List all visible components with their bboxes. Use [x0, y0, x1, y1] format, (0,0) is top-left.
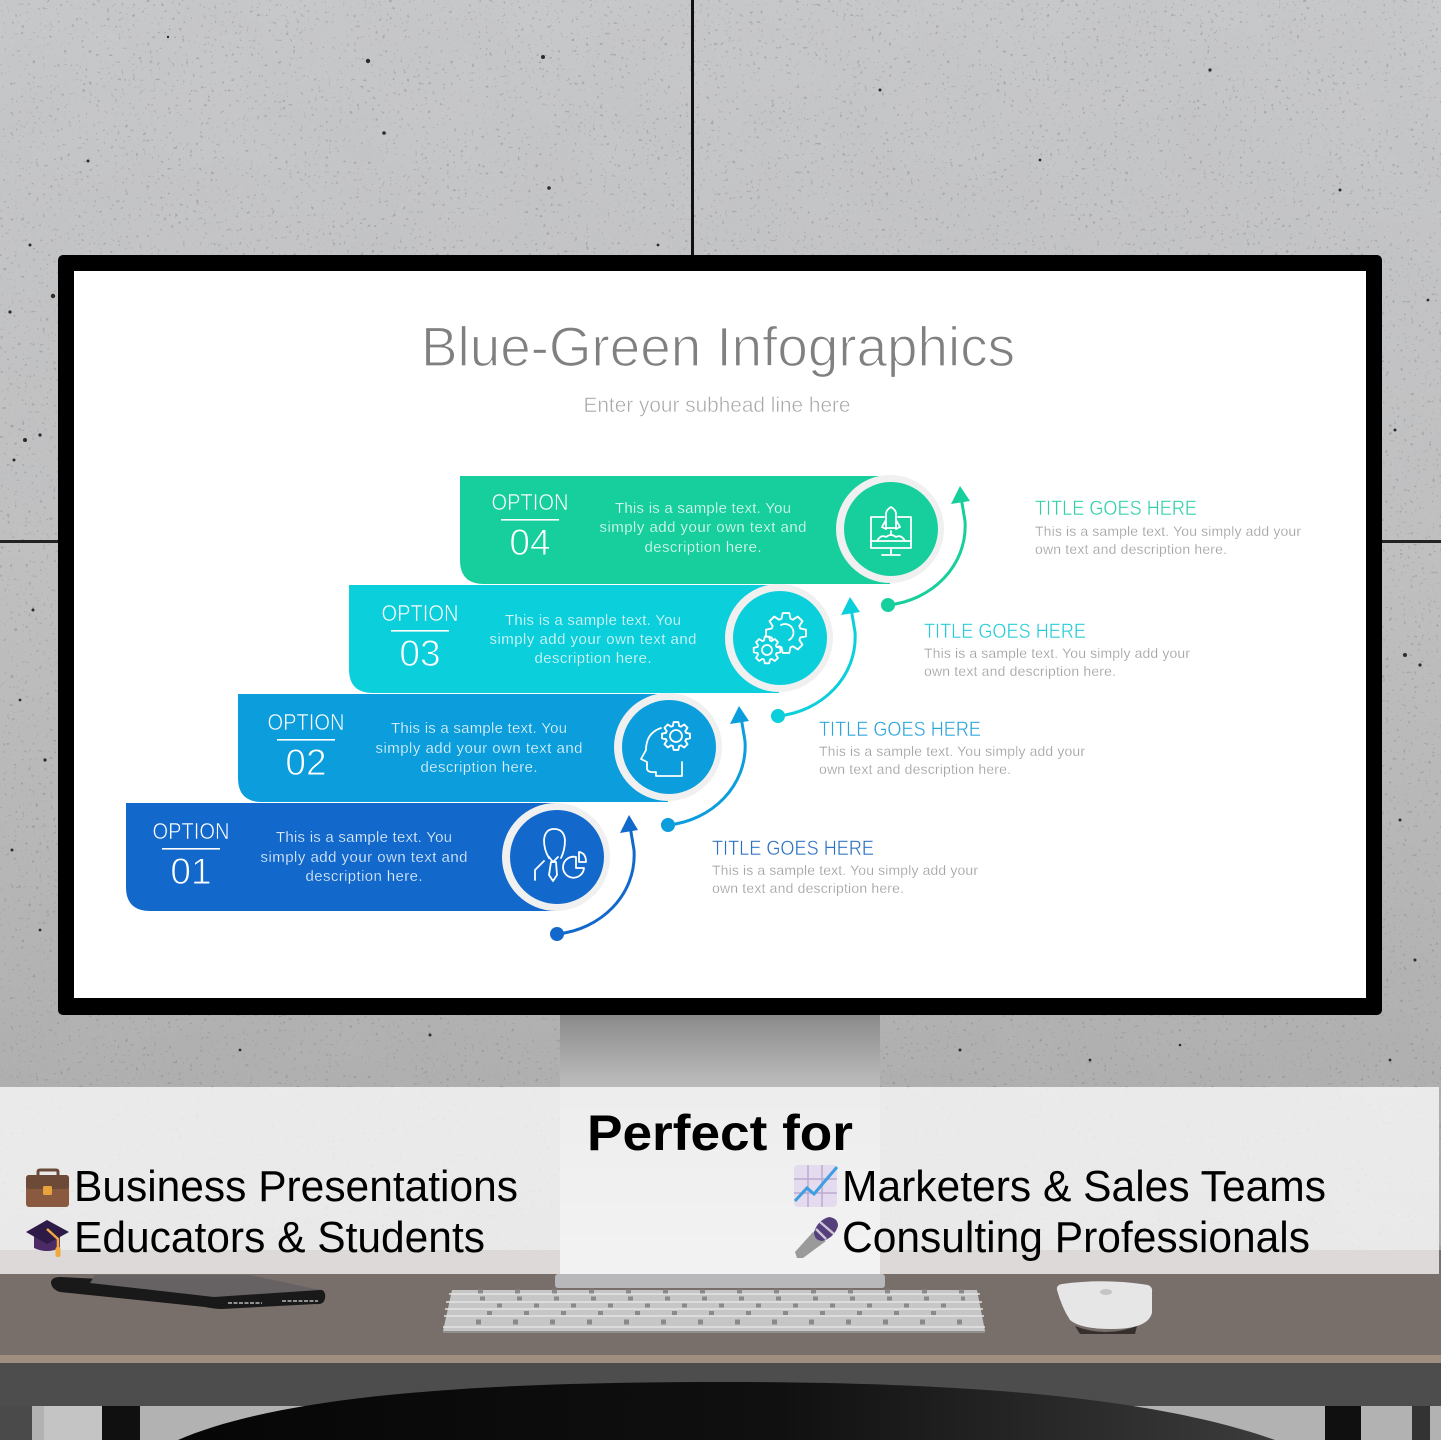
text block: option 03: This is a sample text. You simply add your: [924, 645, 1190, 661]
list item: consulting professionals: Consulting Professionals: [842, 1213, 1310, 1262]
panel: option 01: OPTION: [152, 818, 230, 844]
panel: option 02: 02: [285, 742, 327, 783]
text block: option 03: [924, 620, 1190, 679]
text block: option 01: [712, 837, 978, 896]
keyboard: [443, 1290, 985, 1333]
list item: business presentations: Business Presentations: [74, 1162, 518, 1211]
icon: chart: [794, 1165, 837, 1207]
text block: option 04: [1035, 497, 1301, 557]
panel: option 02: [238, 694, 668, 802]
panel: option 01: This is a sample text. You: [276, 829, 452, 846]
panel: option 02: OPTION: [268, 709, 344, 735]
panel: perfect for banner: [0, 1087, 1439, 1274]
mouse: [1057, 1281, 1152, 1334]
panel: option 03: [349, 585, 779, 693]
office chair back: [178, 1382, 1275, 1440]
icon: briefcase: [26, 1170, 69, 1207]
list item: marketers and sales teams: Marketers & Sales Teams: [842, 1162, 1326, 1211]
list item: educators and students: Educators & Students: [74, 1213, 485, 1262]
panel: option 03: description here.: [534, 650, 652, 667]
phone on desk: [51, 1275, 325, 1309]
arrow: option 03: [771, 597, 860, 723]
monitor stand: [560, 1014, 880, 1274]
heading: perfect for: Perfect for: [587, 1105, 853, 1161]
text block: option 03: TITLE GOES HERE: [924, 620, 1086, 643]
monitor stand base: [555, 1274, 885, 1288]
desk: [0, 1250, 1441, 1440]
text block: option 04: This is a sample text. You simply add your: [1035, 523, 1301, 539]
panel: option 03: 03: [399, 633, 441, 674]
title: Blue-Green Infographics: [421, 315, 1015, 378]
text block: option 02: TITLE GOES HERE: [819, 718, 981, 741]
icon: person with pie chart: [502, 803, 610, 911]
monitor screen: [74, 271, 1366, 998]
panel: option 02: simply add your own text and: [376, 740, 582, 757]
panel: option 03: This is a sample text. You: [505, 612, 681, 629]
panel: option 03: OPTION: [382, 600, 458, 626]
panel: option 04: simply add your own text and: [600, 519, 806, 536]
text block: option 02: own text and description here.: [819, 761, 1011, 777]
text block: option 02: [819, 718, 1085, 777]
panel: option 04: [460, 476, 890, 584]
panel: option 03: simply add your own text and: [490, 631, 696, 648]
text block: option 03: own text and description here.: [924, 663, 1116, 679]
icon: rocket and monitor: [836, 475, 944, 583]
panel: option 01: [126, 803, 556, 911]
monitor frame: [58, 255, 1382, 1015]
text block: option 04: TITLE GOES HERE: [1035, 497, 1197, 520]
icon: graduation cap: [26, 1220, 69, 1257]
text block: option 01: TITLE GOES HERE: [712, 837, 874, 860]
subtitle: Enter your subhead line here: [584, 394, 850, 417]
arrow: option 04: [881, 486, 970, 612]
panel: option 02: description here.: [420, 759, 538, 776]
panel: option 02: This is a sample text. You: [391, 720, 567, 737]
panel: option 04: 04: [509, 522, 551, 563]
text block: option 04: own text and description here.: [1035, 541, 1227, 557]
icon: microphone: [795, 1217, 838, 1258]
panel: option 01: 01: [170, 851, 212, 892]
icon: two gears: [725, 584, 833, 692]
arrow: option 01: [550, 815, 638, 941]
panel: option 01: description here.: [306, 868, 422, 885]
arrow: option 02: [661, 706, 749, 832]
panel: option 04: This is a sample text. You: [615, 500, 791, 517]
panel: option 04: description here.: [644, 539, 762, 556]
text block: option 02: This is a sample text. You simply add your: [819, 743, 1085, 759]
text block: option 01: own text and description here.: [712, 880, 904, 896]
icon: head with gear: [614, 693, 722, 801]
text block: option 01: This is a sample text. You simply add your: [712, 862, 978, 878]
panel: option 04: OPTION: [492, 489, 568, 515]
panel: option 01: simply add your own text and: [260, 849, 468, 866]
